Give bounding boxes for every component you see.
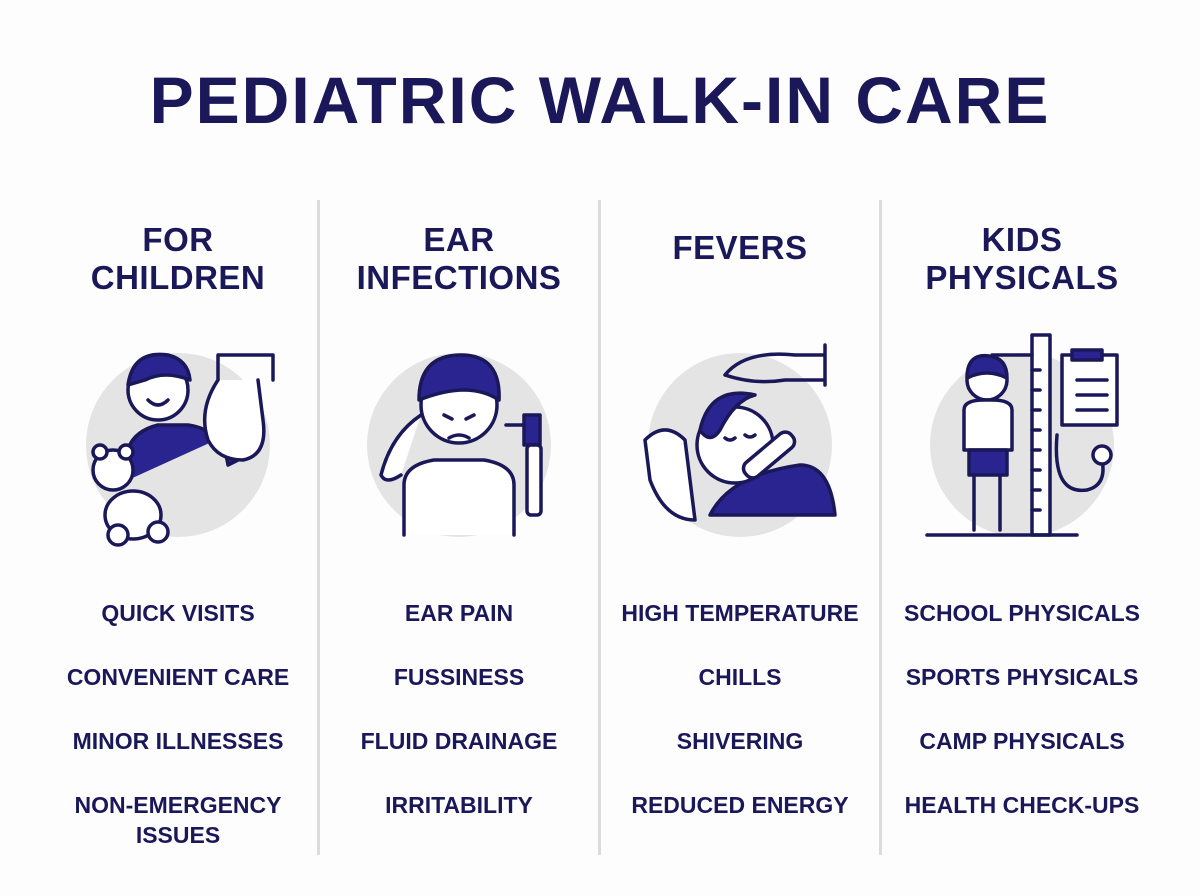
list: kids physicals: SPORTS PHYSICALS: [906, 664, 1138, 690]
list: kids physicals: [904, 600, 1140, 818]
list: for children: NON-EMERGENCY: [74, 792, 282, 818]
panel: for children: [67, 221, 289, 848]
heading: ear infections: EAR: [423, 221, 495, 258]
icon: child with teddy bear: [86, 352, 275, 547]
icon: child with otoscope: [367, 353, 551, 537]
heading: ear infections: INFECTIONS: [357, 259, 561, 296]
list: fevers: [621, 600, 859, 818]
heading: kids physicals: PHYSICALS: [925, 259, 1119, 296]
list: kids physicals: CAMP PHYSICALS: [919, 728, 1125, 754]
list: fevers: REDUCED ENERGY: [631, 792, 849, 818]
list: ear infections: IRRITABILITY: [385, 792, 533, 818]
list: for children: CONVENIENT CARE: [67, 664, 289, 690]
list: ear infections: FUSSINESS: [394, 664, 524, 690]
title: PEDIATRIC WALK-IN CARE: [150, 63, 1050, 137]
heading: for children: CHILDREN: [91, 259, 265, 296]
list: kids physicals: HEALTH CHECK-UPS: [905, 792, 1139, 818]
list: for children: ISSUES: [136, 822, 220, 848]
panel: ear infections: [357, 221, 561, 818]
panel: fevers: [621, 229, 859, 818]
panel: kids physicals: [904, 221, 1140, 818]
list: for children: MINOR ILLNESSES: [73, 728, 283, 754]
list: ear infections: EAR PAIN: [405, 600, 513, 626]
heading: fevers: FEVERS: [672, 229, 808, 266]
icon: child with thermometer: [643, 343, 837, 537]
heading: kids physicals: [925, 221, 1119, 296]
heading: for children: FOR: [142, 221, 214, 258]
list: fevers: SHIVERING: [677, 728, 803, 754]
list: fevers: HIGH TEMPERATURE: [621, 600, 859, 626]
heading: kids physicals: KIDS: [982, 221, 1062, 258]
list: fevers: CHILLS: [698, 664, 782, 690]
icon: child with height chart and clipboard: [925, 333, 1119, 537]
list: kids physicals: SCHOOL PHYSICALS: [904, 600, 1140, 626]
heading: ear infections: [357, 221, 561, 296]
list: for children: QUICK VISITS: [101, 600, 255, 626]
list: ear infections: [361, 600, 557, 818]
list: ear infections: FLUID DRAINAGE: [361, 728, 557, 754]
heading: for children: [91, 221, 265, 296]
list: for children: [67, 600, 289, 848]
